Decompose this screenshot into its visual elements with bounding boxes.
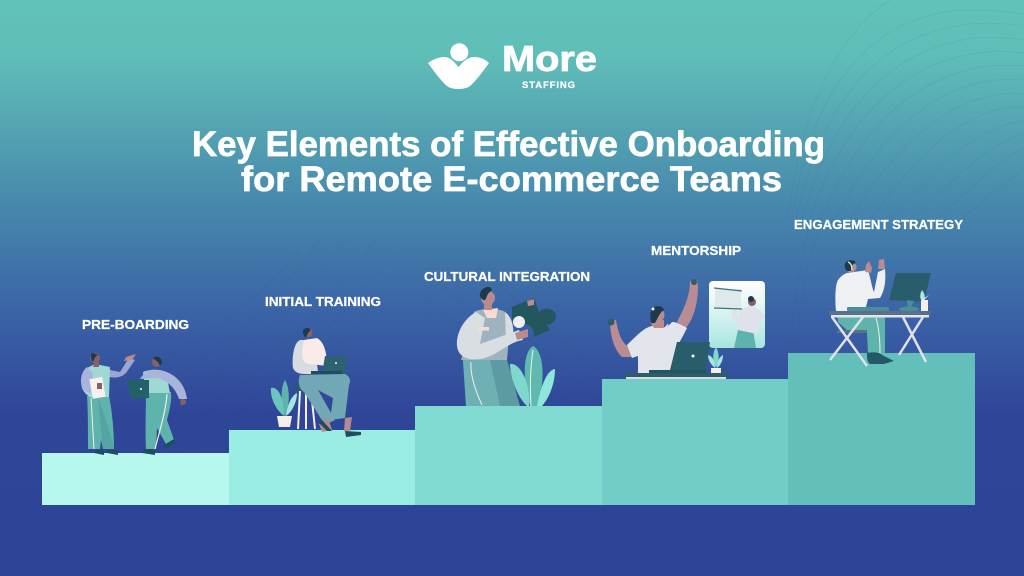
logo wordmark: More <box>502 38 597 79</box>
laptop <box>649 342 710 374</box>
step 3 <box>415 406 602 505</box>
plant <box>510 346 555 406</box>
title: Key Elements of Effective Onboarding <box>192 125 825 164</box>
person holding puzzle <box>457 287 534 406</box>
title <box>192 125 825 199</box>
monitor <box>889 273 931 312</box>
person with laptop <box>127 357 187 455</box>
stool <box>295 385 315 429</box>
seated person with laptop <box>293 328 361 437</box>
heading: engagement strategy: ENGAGEMENT STRATEGY <box>794 217 963 232</box>
heading: mentorship: MENTORSHIP <box>651 243 741 258</box>
illustration: cultural integration <box>457 287 556 406</box>
step 5 <box>788 353 975 505</box>
title: for Remote E-commerce Teams <box>241 160 782 199</box>
staircase <box>42 353 975 505</box>
step 2 <box>229 430 415 505</box>
step 4 <box>602 379 788 505</box>
illustration: initial training <box>271 328 361 437</box>
desk plant <box>920 290 929 311</box>
logo icon <box>428 43 489 89</box>
person at desk <box>835 259 894 364</box>
illustration: mentorship <box>608 279 765 379</box>
presenter video card <box>709 281 765 348</box>
potted plant <box>271 380 297 427</box>
logo tagline: STAFFING <box>522 80 575 91</box>
desk <box>623 373 728 379</box>
person cheering <box>608 279 698 373</box>
puzzle piece <box>512 298 556 337</box>
desk with crossed legs <box>829 311 931 366</box>
step 1 <box>42 453 229 505</box>
heading: cultural integration: CULTURAL INTEGRATION <box>424 269 590 284</box>
small plant <box>708 347 723 374</box>
person with clipboard <box>81 353 136 455</box>
illustration: pre-boarding colleagues <box>81 353 187 455</box>
heading: initial training: INITIAL TRAINING <box>265 294 381 309</box>
logo: More Staffing <box>428 38 597 91</box>
heading: pre-boarding: PRE-BOARDING <box>82 317 189 332</box>
illustration: engagement strategy <box>829 259 931 366</box>
